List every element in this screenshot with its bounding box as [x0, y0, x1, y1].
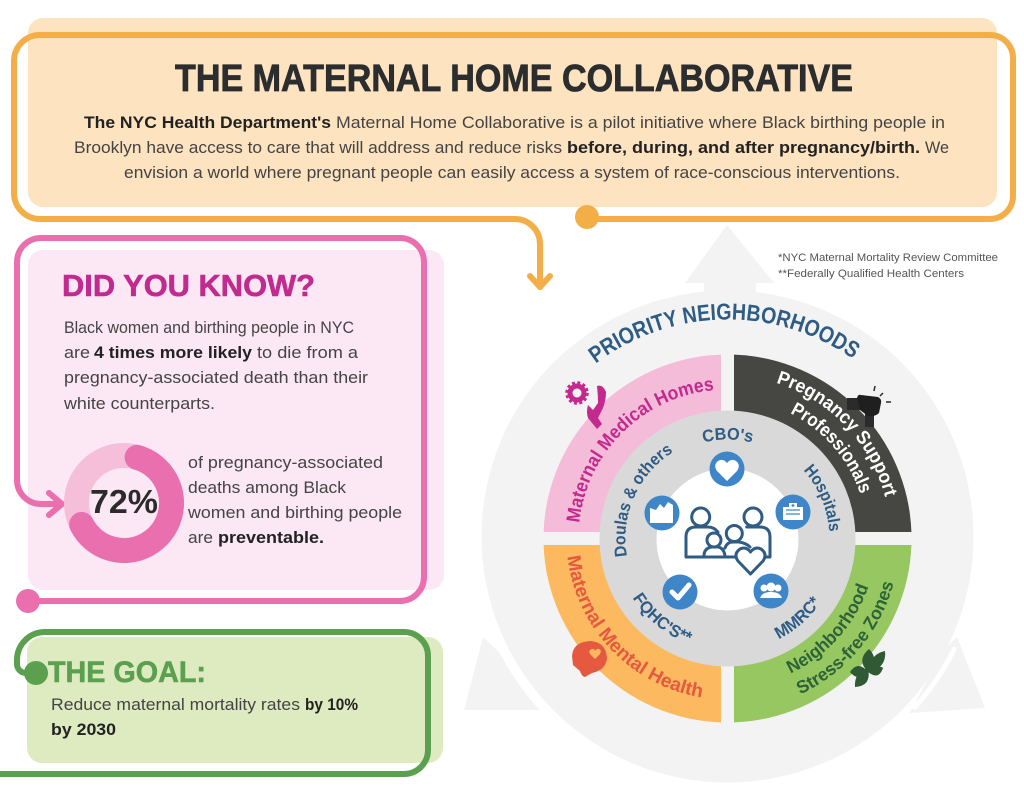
text block: goal statement: Reduce maternal mortality rates	[51, 695, 300, 714]
text block: preventable: of pregnancy-associated	[188, 453, 383, 472]
text block: goal statement: by 10%	[305, 695, 358, 714]
ring label: FQHC's: FQHC'S**	[633, 592, 692, 638]
icon: hand with gear	[566, 382, 606, 429]
pink connector line with arrow	[16, 238, 424, 613]
intro paragraph: Brooklyn have access to care that will address and reduce risks	[74, 138, 562, 157]
footnotes: **Federally Qualified Health Centers	[778, 268, 965, 280]
sector label: pregnancy support professionals: Professionals	[791, 402, 870, 493]
curved heading: priority neighborhoods: PRIORITY NEIGHBORHOODS	[588, 304, 860, 363]
sector: neighborhood stress-free zones	[734, 545, 911, 722]
ring label: CBO's: CBO's	[702, 428, 753, 442]
connector line with arrow from header	[14, 35, 1013, 287]
icon: leaves	[850, 649, 885, 687]
icon: factory	[644, 496, 680, 530]
intro paragraph: before, during, and after pregnancy/birth.	[567, 138, 920, 157]
donut chart: 72%	[65, 444, 183, 562]
donut chart: 72%: 72%	[90, 483, 158, 520]
ring label: hospitals: Hospitals	[804, 464, 840, 531]
text block: 4 times more likely: 4 times more likely	[94, 343, 253, 362]
text block: 4 times more likely: pregnancy-associated death than their	[64, 368, 368, 387]
heading: did you know: DID YOU KNOW?	[62, 268, 315, 303]
text block: preventable: deaths among Black	[188, 478, 347, 497]
text block: 4 times more likely: Black women and birthing people in NYC	[64, 318, 354, 337]
sector: pregnancy support professionals	[734, 355, 911, 532]
text block: preventable: women and birthing people	[187, 503, 402, 522]
text block: preventable: are	[188, 528, 213, 547]
intro paragraph: Maternal Home Collaborative is a pilot initiative where Black birthing people in	[336, 113, 945, 132]
sector label: maternal medical homes: Maternal Medical Homes	[566, 380, 714, 522]
panel: header	[14, 18, 1013, 287]
icon: heart handshake	[710, 452, 744, 486]
diagram: priority neighborhoods wheel	[464, 226, 985, 782]
text block: 4 times more likely: are	[64, 343, 90, 362]
ring label: doulas and others: Doulas & others	[614, 446, 672, 557]
ring label: MMRC: MMRC*	[774, 596, 816, 639]
sector: maternal mental health	[544, 545, 721, 722]
text block: preventable: preventable.	[218, 528, 324, 547]
sector label: neighborhood stress-free zones: Stress-free Zones	[796, 582, 893, 693]
sector: maternal medical homes	[544, 355, 721, 532]
icon: hospital	[776, 494, 810, 530]
intro paragraph: envision a world where pregnant people can easily access a system of race-conscious interventions.	[124, 163, 900, 182]
text block: 4 times more likely: to die from a	[257, 343, 359, 362]
sector label: maternal mental health: Maternal Mental Health	[568, 556, 702, 698]
icon: raised fist	[847, 386, 891, 427]
text block: goal statement	[51, 695, 358, 739]
intro paragraph: The NYC Health Department's	[84, 113, 331, 132]
footnotes	[778, 252, 998, 280]
background cycle arrows	[464, 225, 985, 782]
panel: did you know	[16, 238, 444, 613]
inner ring	[600, 410, 856, 666]
icon: family with heart	[686, 508, 770, 574]
inner white circle	[656, 468, 798, 610]
icon: group of people	[754, 574, 788, 608]
text block: preventable	[187, 453, 402, 547]
title: THE MATERNAL HOME COLLABORATIVE	[175, 58, 853, 100]
sector label: neighborhood stress-free zones: Neighborhood	[786, 583, 868, 674]
sector label: pregnancy support professionals: Pregnancy Support	[777, 370, 897, 497]
icon: check mark	[662, 574, 698, 610]
text block: 4 times more likely	[63, 318, 368, 413]
heading: the goal: THE GOAL:	[48, 656, 206, 689]
panel: the goal	[0, 632, 443, 774]
intro paragraph: We	[925, 138, 949, 157]
intro paragraph	[74, 113, 949, 182]
green connector line	[0, 632, 428, 774]
footnotes: *NYC Maternal Mortality Review Committee	[778, 252, 998, 264]
text block: goal statement: by 2030	[51, 720, 116, 739]
text block: 4 times more likely: white counterparts.	[63, 394, 215, 413]
icon: head with heart	[572, 641, 607, 677]
